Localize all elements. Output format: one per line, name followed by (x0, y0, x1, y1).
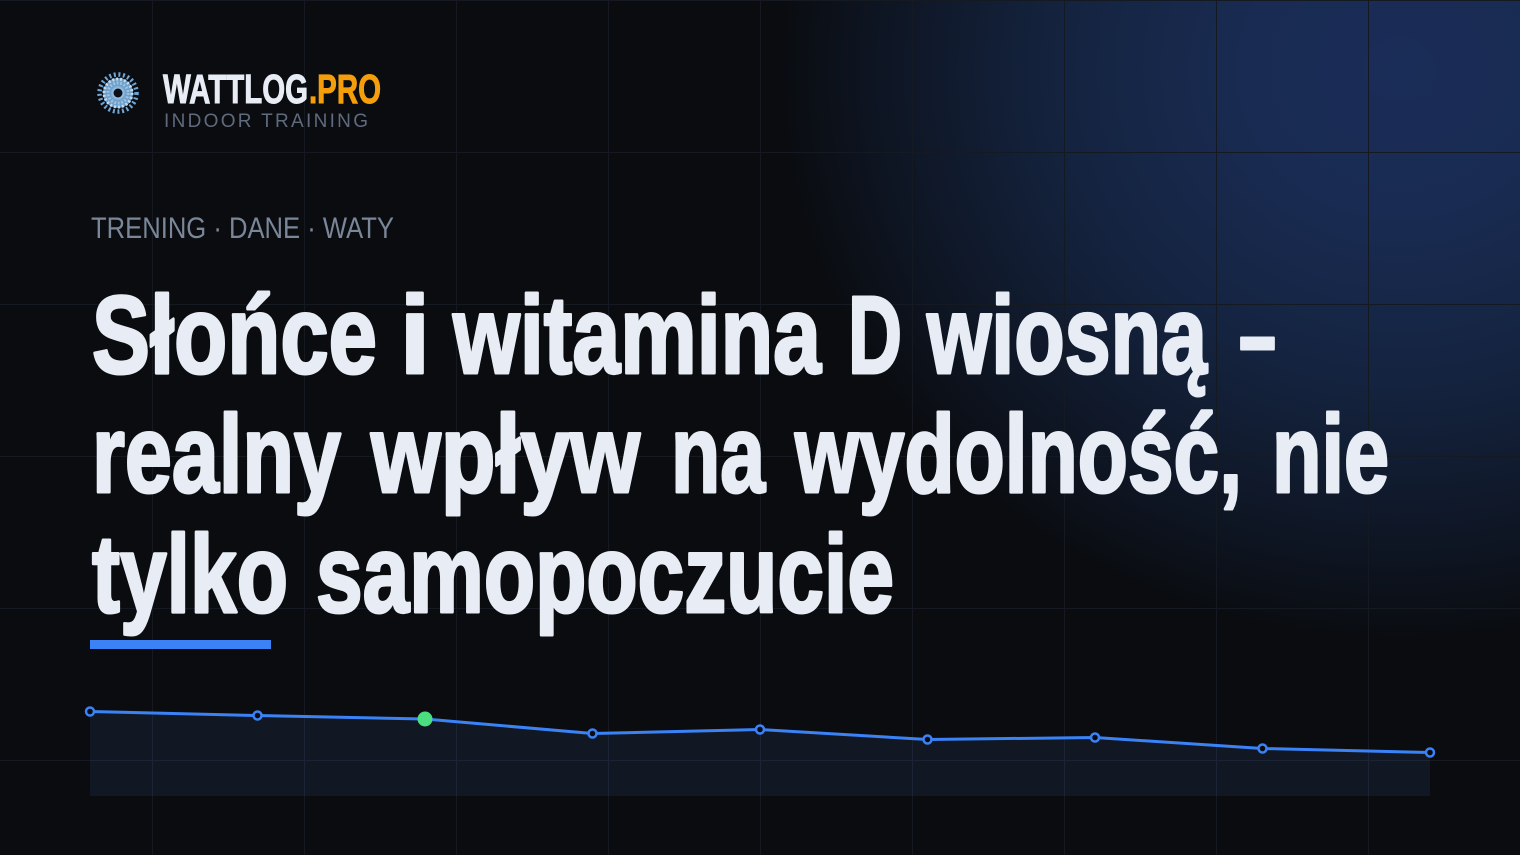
title (92, 274, 1389, 636)
tagline: INDOOR TRAINING (164, 111, 368, 132)
title: witamina (452, 274, 822, 397)
title: tylko (92, 513, 288, 636)
brand name: .PRO (309, 66, 381, 112)
title: realny (92, 393, 341, 516)
title: wydolność, (794, 393, 1242, 516)
title: D (848, 274, 902, 397)
title: wiosną (926, 274, 1208, 397)
title: Słońce (92, 274, 377, 397)
title: wpływ (370, 393, 640, 516)
data points (86, 708, 1434, 756)
highlighted data point (418, 712, 432, 726)
title: na (671, 393, 766, 516)
logo (100, 66, 381, 132)
title: i (400, 274, 430, 397)
title underline accent (90, 640, 271, 649)
line chart (86, 708, 1434, 796)
eyebrow text: TRENING · DANE · WATY (91, 212, 394, 245)
brand name: WATTLOG (163, 66, 308, 112)
chart line (90, 712, 1430, 752)
title: nie (1272, 393, 1389, 516)
chart area fill (90, 712, 1430, 796)
title: samopoczucie (316, 513, 894, 636)
icon: cassette gear (100, 74, 136, 112)
title: – (1239, 274, 1276, 397)
